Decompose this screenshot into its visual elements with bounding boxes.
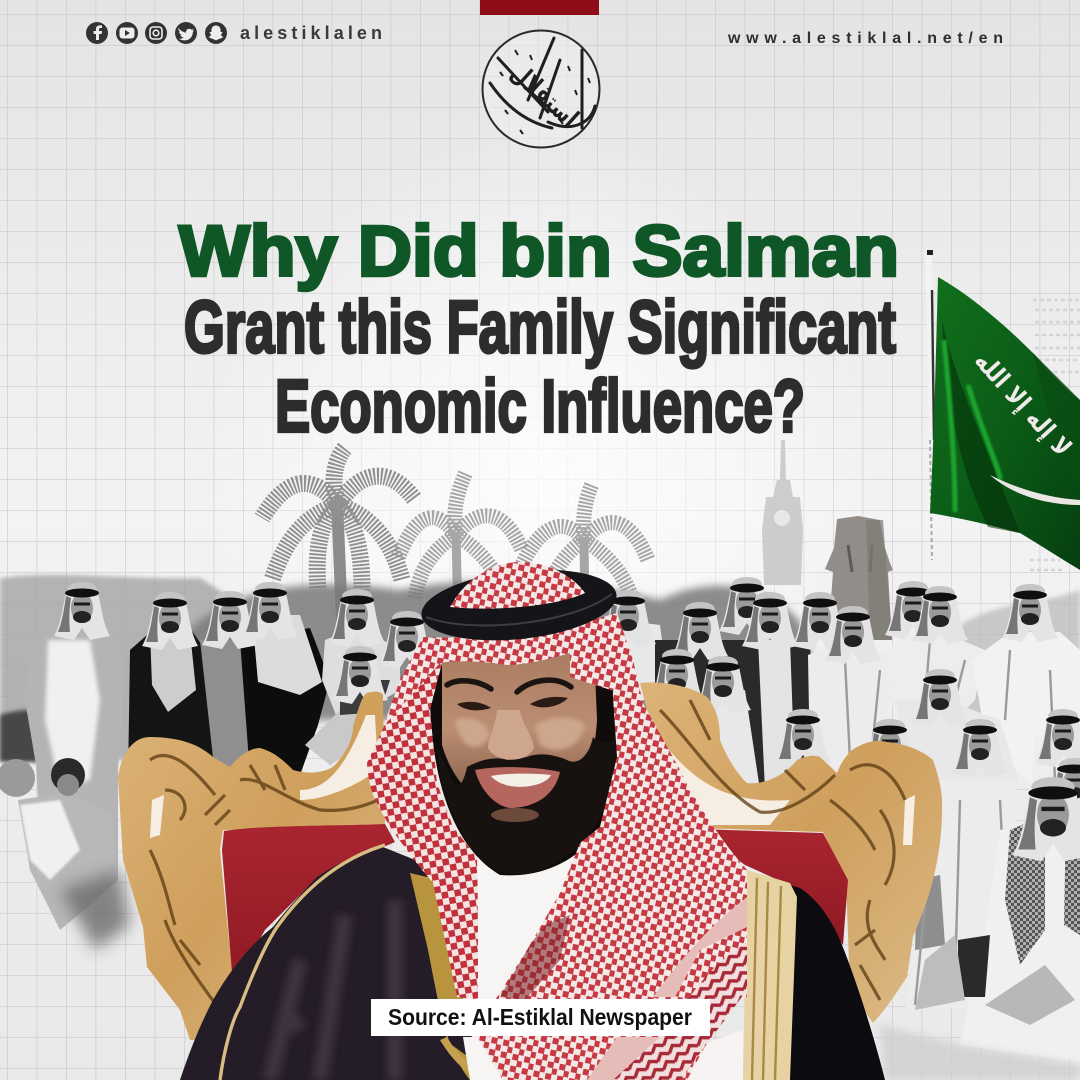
keffiyeh left drape xyxy=(367,640,478,1000)
thin gold trim xyxy=(220,845,385,1080)
seated man xyxy=(960,820,1080,1062)
robe white man xyxy=(25,622,125,905)
hair shadow xyxy=(430,650,622,875)
keffiyeh dome xyxy=(450,562,585,609)
palm trees xyxy=(262,448,648,620)
source label xyxy=(371,999,710,1036)
dark robed men xyxy=(128,628,218,780)
crowd: right heads xyxy=(600,577,1080,861)
title line 3: Economic Influence? xyxy=(275,364,805,448)
throne left wing xyxy=(118,692,385,1040)
robe fold lines xyxy=(845,640,1055,1005)
palm 3 xyxy=(522,484,648,620)
eyes xyxy=(457,697,568,710)
flag dark folds xyxy=(942,320,1020,533)
icon: youtube xyxy=(116,22,138,44)
social handle: alestiklalen xyxy=(240,23,382,43)
white thobe xyxy=(463,840,590,1000)
keffiyeh shadow fold xyxy=(500,915,570,1000)
keffiyeh zigzag border xyxy=(613,943,747,1080)
man xyxy=(180,561,885,1080)
palm 2 xyxy=(398,472,522,620)
robe right xyxy=(780,885,885,1080)
keffiyeh forehead band xyxy=(383,613,643,727)
face xyxy=(442,642,597,816)
gold trim right xyxy=(743,870,797,1080)
white thobe right xyxy=(680,1030,743,1080)
ground shadow right xyxy=(880,1025,1080,1080)
flag pole xyxy=(925,250,934,560)
logo: calligraphy roundel: استقلال xyxy=(504,58,584,134)
social icons row xyxy=(86,22,227,44)
crowd: right bodies xyxy=(620,620,1080,1062)
icon: snapchat xyxy=(205,22,227,44)
throne xyxy=(118,682,942,1040)
website url: www.alestiklal.net/en xyxy=(727,30,1003,47)
tree line behind crowd xyxy=(180,580,810,720)
black robe left xyxy=(180,847,480,1080)
landscape: hills xyxy=(0,575,1080,762)
flag sword xyxy=(990,475,1080,505)
saudi flag xyxy=(930,277,1080,570)
throne highlights xyxy=(150,715,915,845)
palm 1 xyxy=(262,448,415,620)
top red bar xyxy=(480,0,599,15)
children xyxy=(18,792,118,930)
icon: twitter xyxy=(175,22,197,44)
clock tower xyxy=(762,440,803,585)
keffiyeh right drape xyxy=(477,640,747,1080)
nose xyxy=(488,710,534,760)
mouth lips xyxy=(475,767,560,808)
icon: facebook xyxy=(86,22,108,44)
keffiyeh pink band xyxy=(587,897,747,1080)
crowd: left heads xyxy=(54,582,435,704)
eyebrows xyxy=(447,680,571,692)
agal black ring xyxy=(418,561,620,649)
logo: calligraphy roundel xyxy=(482,30,600,148)
fort tower xyxy=(825,516,893,640)
throne carved shadows xyxy=(150,700,905,1010)
teeth xyxy=(491,774,551,787)
face highlights xyxy=(455,718,585,750)
red cushion left xyxy=(222,824,395,985)
beard xyxy=(437,737,617,874)
seated figure arm xyxy=(305,700,375,765)
throne right wing xyxy=(640,682,942,1023)
flag bright folds xyxy=(944,340,1000,512)
gold trim centre left xyxy=(410,873,500,1080)
title line 1: Why Did bin Salman xyxy=(179,212,899,292)
icon: instagram xyxy=(145,22,167,44)
source label: Source: Al-Estiklal Newspaper xyxy=(388,1004,692,1030)
faint newspaper text behind flag xyxy=(1030,300,1080,570)
robe texture xyxy=(270,900,395,1080)
chin skin between lip and beard xyxy=(491,808,539,822)
red cushion right xyxy=(697,829,848,945)
title xyxy=(179,212,899,448)
crowd: left bodies xyxy=(0,615,400,950)
